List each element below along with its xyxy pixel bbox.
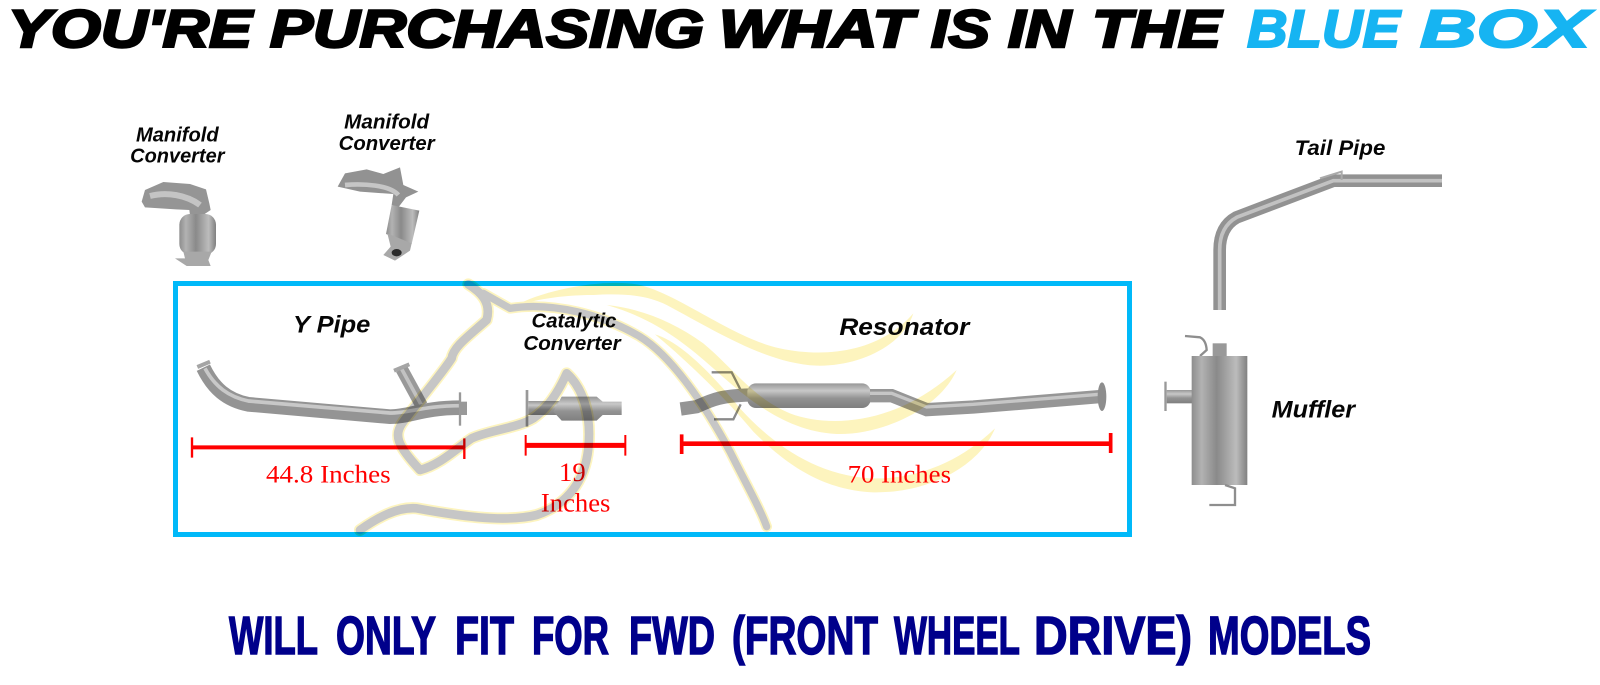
tail pipe xyxy=(1220,172,1442,310)
right manifold converter label: Converter xyxy=(339,133,436,155)
horse watermark xyxy=(360,283,995,530)
title xyxy=(8,0,1594,59)
bottom fitment note: WHEEL xyxy=(894,606,1020,666)
tail pipe label: Tail Pipe xyxy=(1295,136,1385,160)
bottom fitment note: DRIVE) xyxy=(1034,606,1192,666)
y pipe dimension line xyxy=(192,437,464,459)
catalytic converter label: Converter xyxy=(523,333,622,355)
catalytic converter label: Catalytic xyxy=(531,311,616,333)
manifold converters xyxy=(130,111,436,266)
left manifold converter label: Converter xyxy=(130,146,226,168)
catalytic converter length: Inches xyxy=(541,488,610,518)
y pipe length: 44.8 Inches xyxy=(266,460,391,488)
y pipe xyxy=(197,362,467,426)
title: BLUE xyxy=(1247,0,1402,59)
title: IS xyxy=(931,0,990,59)
bottom fitment note: WILL xyxy=(229,606,318,666)
bottom fitment note: FOR xyxy=(532,606,609,666)
panel contents: left side xyxy=(192,311,625,518)
catalytic converter length: 19 xyxy=(559,457,586,487)
muffler label: Muffler xyxy=(1272,396,1357,423)
resonator length: 70 Inches xyxy=(848,460,951,488)
title: THE xyxy=(1092,0,1223,59)
bottom fitment note: MODELS xyxy=(1208,606,1371,666)
blue box panel xyxy=(176,284,1130,534)
right manifold converter label: Manifold xyxy=(344,111,430,133)
title: PURCHASING xyxy=(270,0,704,59)
tail pipe and muffler xyxy=(1164,136,1442,505)
catalytic converter dimension line xyxy=(526,435,625,456)
muffler body xyxy=(1164,336,1247,505)
title: WHAT xyxy=(719,0,919,59)
horse outline xyxy=(360,284,767,530)
resonator xyxy=(681,372,1106,419)
panel contents: right side xyxy=(681,314,1111,488)
bottom fitment note: FIT xyxy=(455,606,514,666)
y pipe label: Y Pipe xyxy=(293,311,370,338)
bottom fitment note: ONLY xyxy=(336,606,436,666)
catalytic converter xyxy=(526,390,622,427)
title: YOU'RE xyxy=(8,0,254,59)
left manifold converter label: Manifold xyxy=(136,125,219,147)
title: IN xyxy=(1008,0,1073,59)
resonator label: Resonator xyxy=(839,314,971,341)
right manifold converter xyxy=(338,167,419,261)
resonator dimension line xyxy=(682,433,1111,454)
title: BOX xyxy=(1420,0,1594,59)
bottom fitment note: (FRONT xyxy=(732,606,878,666)
bottom fitment note: FWD xyxy=(629,606,715,666)
left manifold converter xyxy=(142,182,216,266)
yellow mane xyxy=(513,283,995,492)
